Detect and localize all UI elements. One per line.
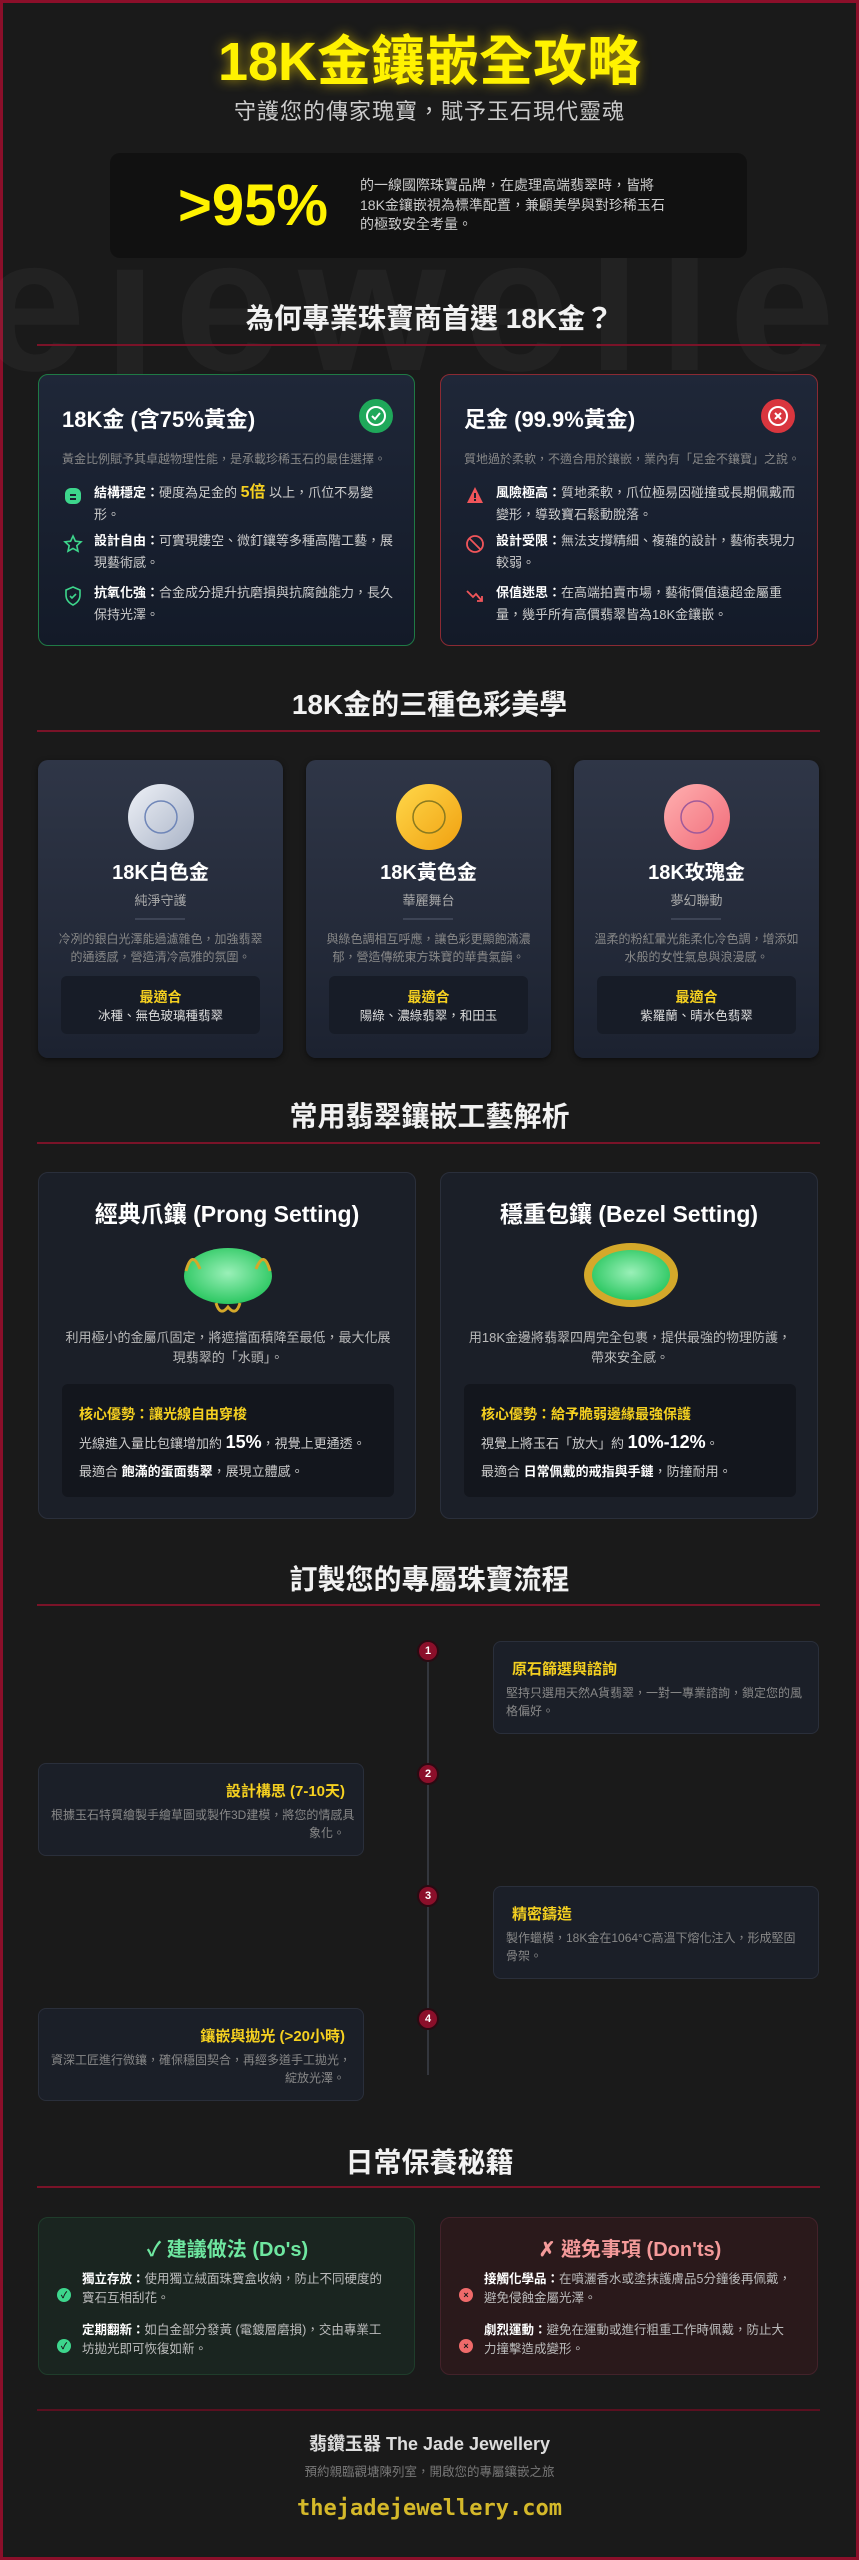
item: limited: [466, 533, 795, 570]
step 2: [419, 1765, 437, 1783]
panel: white gold: 冷冽的銀白光澤能過濾雜色，加強翡翠: [58, 932, 262, 946]
item: oxidation: 保持光澤。: [94, 607, 159, 622]
best for box: [329, 976, 528, 1034]
panel: rose gold: 18K玫瑰金: [648, 862, 745, 884]
core advantage box: [62, 1384, 394, 1497]
core advantage box: 最適合 飽滿的蛋面翡翠，展現立體感。: [79, 1464, 304, 1479]
core advantage box: 光線進入量比包鑲增加約 15%，視覺上更通透。: [79, 1432, 366, 1452]
panel: pure gold: [440, 374, 818, 646]
stat number: >95%: [178, 173, 328, 238]
core advantage box: 最適合 日常佩戴的戒指與手鏈，防撞耐用。: [481, 1464, 732, 1479]
step 1: [419, 1642, 437, 1660]
best for box: 最適合: [676, 989, 718, 1005]
footer: 翡鑽玉器 The Jade Jewellery: [309, 2434, 550, 2454]
panel: donts: 避免侵蝕金屬光澤。: [484, 2291, 597, 2305]
step 3: 3: [425, 1890, 431, 1902]
item: oxidation: 抗氧化強：合金成分提升抗磨損與抗腐蝕能力，長久: [94, 585, 393, 600]
subtitle: 守護您的傳家瑰寶，賦予玉石現代靈魂: [234, 99, 625, 124]
item: structure: 結構穩定：硬度為足金的 5倍 以上，爪位不易變: [94, 484, 373, 501]
item: design: [63, 533, 393, 570]
core advantage box: [464, 1384, 796, 1497]
dont item 2: [459, 2339, 473, 2353]
timeline: 根據玉石特質繪製手繪草圖或製作3D建模，將您的情感具: [51, 1808, 354, 1822]
panel: dos: 寶石互相刮花。: [82, 2291, 170, 2305]
panel: dos: ✓ 建議做法 (Do's): [147, 2239, 308, 2261]
card title: 足金 (99.9%黃金): [464, 407, 635, 432]
timeline: [38, 1640, 819, 2101]
panel: bezel: 用18K金邊將翡翠四周完全包裹，提供最強的物理防護，: [469, 1330, 791, 1345]
item: risk: 變形，導致寶石鬆動脫落。: [496, 507, 652, 522]
do item 1: [57, 2288, 71, 2302]
panel: white gold: 18K白色金: [112, 862, 209, 884]
panel: yellow gold: 18K黃色金: [380, 862, 477, 884]
item: structure: [65, 483, 373, 522]
item: limited: 較弱。: [496, 555, 535, 570]
stat text: 的一線國際珠寶品牌，在處理高端翡翠時，皆將: [360, 177, 654, 193]
timeline: 格偏好。: [506, 1704, 554, 1718]
step 3: [419, 1887, 437, 1905]
panel: rose gold: 溫柔的粉紅暈光能柔化冷色調，增添如: [594, 932, 798, 946]
panel: white gold: 純淨守護: [134, 893, 186, 908]
timeline: 原石篩選與諮詢: [512, 1661, 617, 1678]
best for box: 最適合: [408, 989, 450, 1005]
timeline: 製作蠟模，18K金在1064°C高溫下熔化注入，形成堅固: [506, 1931, 796, 1945]
dont item 2: ×: [463, 2341, 469, 2351]
best for box: 陽綠、濃綠翡翠，和田玉: [360, 1009, 497, 1023]
stat text: 的極致安全考量。: [360, 216, 472, 232]
timeline: 設計構思 (7-10天): [226, 1783, 345, 1800]
panel: rose gold: [574, 760, 819, 1058]
panel: prong: [38, 1172, 416, 1519]
panel: prong: 經典爪鑲 (Prong Setting): [95, 1201, 359, 1227]
item: risk: 風險極高：質地柔軟，爪位極易因碰撞或長期佩戴而: [496, 485, 795, 500]
item: design: 現藝術感。: [94, 555, 159, 570]
icon: check: [359, 399, 393, 433]
heading: three colours: 18K金的三種色彩美學: [292, 689, 567, 720]
panel: rose gold: 水般的女性氣息與浪漫感。: [624, 950, 768, 964]
card desc: 質地過於柔軟，不適合用於鑲嵌，業內有「足金不鑲寶」之說。: [464, 452, 800, 466]
timeline: 資深工匠進行微鑲，確保穩固契合，再經多道手工拋光，: [51, 2053, 351, 2067]
card desc: 黃金比例賦予其卓越物理性能，是承載珍稀玉石的最佳選擇。: [62, 452, 386, 466]
panel: white gold: 的通透感，營造清冷高雅的氛圍。: [70, 950, 250, 964]
panel: donts: [440, 2217, 818, 2375]
panel: donts: 力撞擊造成變形。: [484, 2342, 584, 2356]
step 2: 2: [425, 1768, 431, 1780]
step 4: [419, 2010, 437, 2028]
panel: dos: 定期翻新：如白金部分發黃 (電鍍層磨損)，交由專業工: [82, 2323, 381, 2337]
icon: prong gem: [184, 1248, 272, 1313]
heading: why 18K: 為何專業珠寶商首選 18K金？: [246, 303, 613, 334]
footer: thejadejewellery.com: [297, 2496, 562, 2521]
timeline: 精密鑄造: [512, 1906, 572, 1923]
panel: yellow gold: 華麗舞台: [402, 893, 454, 908]
best for box: 最適合: [140, 989, 182, 1005]
dont item 1: [459, 2288, 473, 2302]
panel: prong: 現翡翠的「水頭」。: [173, 1350, 283, 1365]
item: value: [466, 585, 782, 622]
panel: bezel: 帶來安全感。: [591, 1350, 669, 1365]
panel: yellow gold: [306, 760, 551, 1058]
panel: white gold: [38, 760, 283, 1058]
do item 2: ✓: [61, 2341, 67, 2351]
footer: 預約親臨觀塘陳列室，開啟您的專屬鑲嵌之旅: [304, 2465, 554, 2479]
item: oxidation: [65, 585, 393, 622]
core advantage box: 核心優勢：給予脆弱邊緣最強保護: [481, 1406, 691, 1422]
do item 1: ✓: [61, 2290, 67, 2300]
timeline: 鑲嵌與拋光 (>20小時): [200, 2028, 345, 2045]
heading: care: 日常保養秘籍: [345, 2147, 514, 2178]
item: limited: 設計受限：無法支撐精細、複雜的設計，藝術表現力: [496, 533, 795, 548]
timeline: 象化。: [309, 1826, 345, 1840]
panel: 18K gold: [38, 374, 415, 646]
best for box: 紫羅蘭、晴水色翡翠: [640, 1009, 753, 1023]
core advantage box: 核心優勢：讓光線自由穿梭: [79, 1406, 247, 1422]
title: 18K金鑲嵌全攻略: [218, 32, 641, 92]
panel: donts: 劇烈運動：避免在運動或進行粗重工作時佩戴，防止大: [484, 2323, 784, 2337]
best for box: [61, 976, 260, 1034]
footer: [297, 2434, 562, 2521]
icon: x: [761, 399, 795, 433]
icon: bezel gem: [584, 1243, 678, 1307]
timeline: 綻放光澤。: [285, 2071, 345, 2085]
best for box: [597, 976, 796, 1034]
panel: yellow gold: 與綠色調相互呼應，讓色彩更顯飽滿濃: [326, 932, 530, 946]
panel: prong: 利用極小的金屬爪固定，將遮擋面積降至最低，最大化展: [65, 1330, 390, 1345]
panel: bezel: [440, 1172, 818, 1519]
core advantage box: 視覺上將玉石「放大」約 10%-12%。: [481, 1432, 719, 1452]
heading: settings: 常用翡翠鑲嵌工藝解析: [289, 1101, 570, 1132]
panel: bezel: 穩重包鑲 (Bezel Setting): [500, 1201, 758, 1227]
stat box: [110, 153, 747, 258]
step 1: 1: [425, 1645, 431, 1657]
timeline: 堅持只選用天然A貨翡翠，一對一專業諮詢，鎖定您的風: [506, 1686, 802, 1700]
item: value: 量，幾乎所有高價翡翠皆為18K金鑲嵌。: [496, 607, 727, 622]
item: risk: [467, 485, 795, 522]
stat text: 18K金鑲嵌視為標準配置，兼顧美學與對珍稀玉石: [360, 196, 665, 212]
icon: rose circle: [664, 784, 730, 850]
item: design: 設計自由：可實現鏤空、微釘鑲等多種高階工藝，展: [94, 533, 393, 548]
item: structure: 形。: [94, 507, 120, 522]
panel: dos: 獨立存放：使用獨立絨面珠寶盒收納，防止不同硬度的: [82, 2272, 382, 2286]
icon: yellow circle: [396, 784, 462, 850]
panel: yellow gold: 郁，營造傳統東方珠寶的華貴氣韻。: [332, 950, 524, 964]
heading: process: 訂製您的專屬珠寶流程: [289, 1564, 570, 1595]
panel: dos: 坊拋光即可恢復如新。: [82, 2342, 207, 2356]
dont item 1: ×: [463, 2290, 469, 2300]
item: value: 保值迷思：在高端拍賣市場，藝術價值遠超金屬重: [496, 585, 782, 600]
step 4: 4: [425, 2013, 431, 2025]
timeline: 骨架。: [506, 1949, 542, 1963]
panel: donts: 接觸化學品：在噴灑香水或塗抹護膚品5分鐘後再佩戴，: [484, 2272, 791, 2286]
card title: 18K金 (含75%黃金): [62, 407, 255, 432]
panel: dos: [38, 2217, 415, 2375]
panel: rose gold: 夢幻聯動: [670, 893, 722, 908]
best for box: 冰種、無色玻璃種翡翠: [98, 1009, 223, 1023]
panel: donts: ✗ 避免事項 (Don'ts): [539, 2239, 721, 2261]
do item 2: [57, 2339, 71, 2353]
icon: white circle: [128, 784, 194, 850]
stat text: [360, 177, 665, 232]
